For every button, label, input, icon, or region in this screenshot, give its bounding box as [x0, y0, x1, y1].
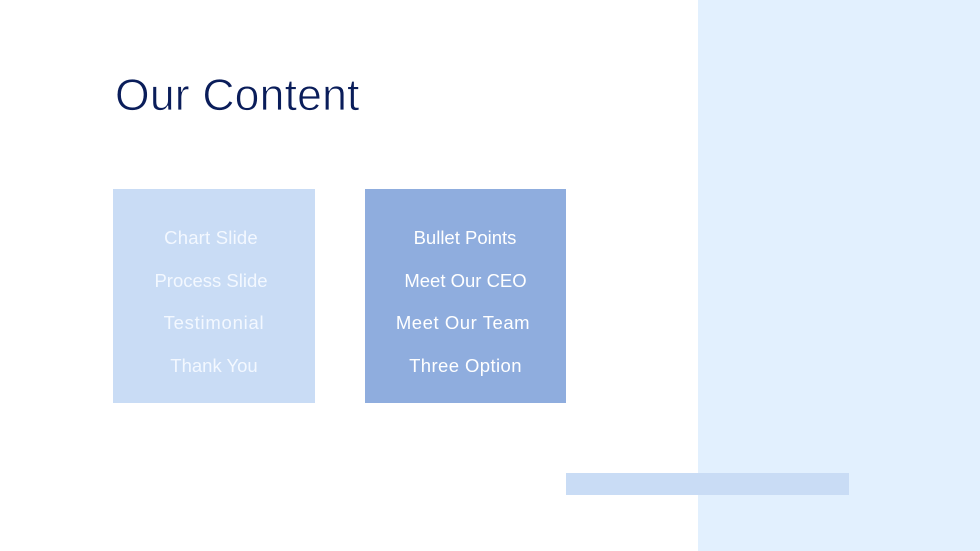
title: Our Content: [115, 71, 360, 120]
accent bar: [566, 473, 849, 495]
item: Meet Our Team: Meet Our Team: [396, 312, 530, 333]
item: Process Slide: Process Slide: [154, 270, 268, 291]
item: Bullet Points: Bullet Points: [414, 227, 516, 248]
item: Testimonial: Testimonial: [164, 312, 264, 333]
item: Thank You: Thank You: [170, 355, 258, 376]
item: Three Option: Three Option: [409, 355, 522, 376]
item: Chart Slide: Chart Slide: [164, 227, 258, 248]
item: Meet Our CEO: Meet Our CEO: [404, 270, 527, 291]
panel: right background: [698, 0, 980, 551]
panel: left content list: [113, 189, 315, 403]
panel: right content list: [365, 189, 566, 403]
